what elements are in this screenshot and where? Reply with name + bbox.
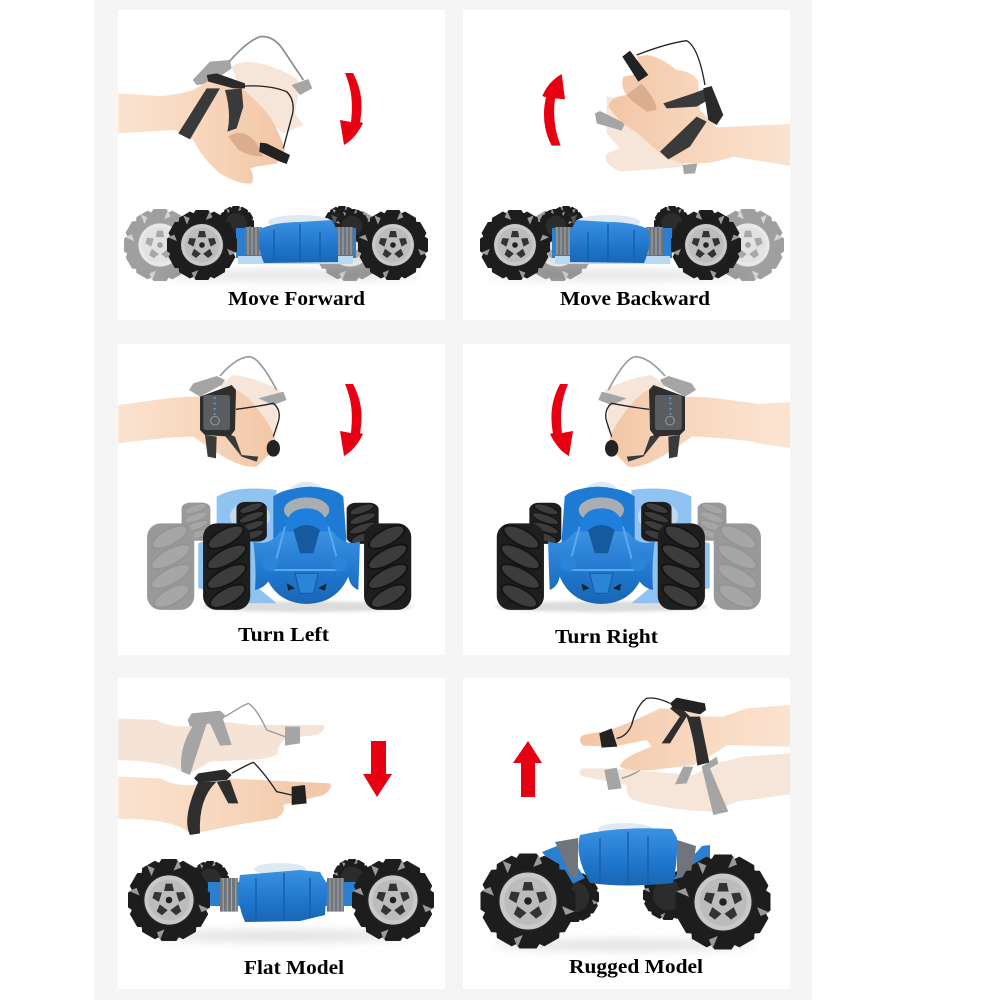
car: front view turning left (147, 482, 413, 612)
arrow: curved down (340, 384, 363, 456)
car: flat mode with ghost moving forward (124, 206, 428, 281)
panel: Turn Left (118, 344, 445, 655)
car: front view turning right (495, 482, 761, 612)
panel: Turn Right (463, 344, 790, 655)
arrow: curved down (340, 73, 363, 145)
icon: wrist sensor turning right (598, 357, 790, 467)
arrow: curved down mirrored (550, 384, 573, 456)
car: rugged model (480, 823, 770, 950)
label: Move Backward (560, 288, 710, 310)
icon: wrist sensor turning left (118, 357, 287, 467)
icon: hand with gesture sensor tilting backward (595, 41, 790, 174)
arrow: straight down (363, 741, 392, 797)
arrow: straight up (513, 741, 542, 797)
panel: Flat Model (118, 678, 445, 989)
panel: Move Backward (463, 10, 790, 320)
car: flat mode with ghost moving backward (480, 206, 784, 281)
panel: Move Forward (118, 10, 445, 320)
icon: raised ghost hand and flat hand (118, 703, 331, 835)
label: Move Forward (228, 288, 365, 310)
label: Rugged Model (569, 956, 703, 978)
arrow: curved up (542, 74, 565, 146)
panel: Rugged Model (463, 678, 790, 989)
background band (94, 0, 812, 1000)
label: Flat Model (244, 957, 344, 979)
icon: raised hand and ghost flat hand (579, 698, 790, 815)
icon: hand with gesture sensor tilting forward (118, 36, 312, 184)
car: flat model (128, 859, 434, 941)
label: Turn Right (555, 626, 658, 648)
label: Turn Left (238, 624, 329, 646)
